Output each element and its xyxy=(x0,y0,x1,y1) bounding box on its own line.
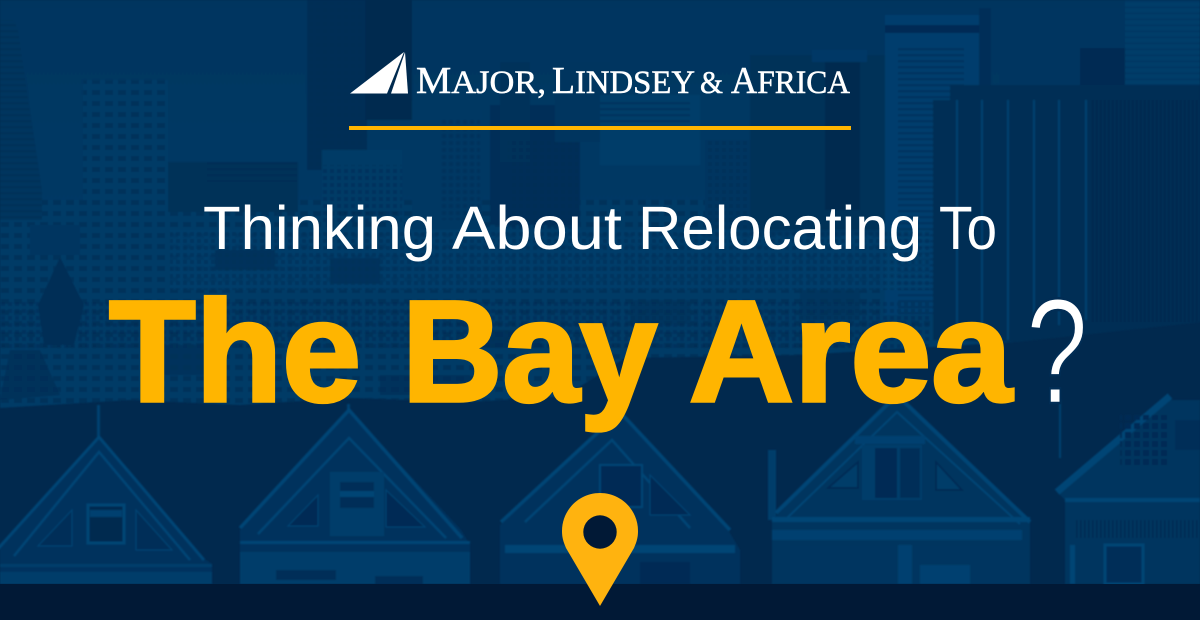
house 4 xyxy=(768,395,1030,584)
logo wordmark: & xyxy=(700,64,723,100)
subtitle: To xyxy=(939,194,997,262)
house 2 xyxy=(240,404,470,584)
divider rule xyxy=(349,126,851,130)
logo: Major, Lindsey & Africa xyxy=(350,52,850,102)
logo wordmark: LINDSEY xyxy=(552,60,695,102)
main title xyxy=(109,271,1013,432)
house 1 xyxy=(0,405,212,584)
house 5 xyxy=(1057,396,1200,584)
logo wordmark: MAJOR, xyxy=(416,60,546,102)
subtitle: Relocating xyxy=(638,194,922,262)
subtitle: About xyxy=(452,194,622,262)
bottom band xyxy=(0,584,1200,620)
background: Painted Ladies rooftops xyxy=(0,395,1200,584)
subtitle xyxy=(203,194,997,262)
lamp post xyxy=(1059,400,1061,458)
logo icon: sails xyxy=(350,52,408,94)
main title: Area xyxy=(689,271,1013,432)
question mark: ? xyxy=(1026,267,1088,435)
main title: Bay xyxy=(402,271,657,432)
logo wordmark: AFRICA xyxy=(731,60,850,102)
background: San Francisco skyline xyxy=(0,0,1200,408)
icon: location pin xyxy=(562,493,638,606)
main title: The xyxy=(109,271,361,432)
logo wordmark xyxy=(416,60,850,102)
house 3 xyxy=(500,412,740,584)
subtitle: Thinking xyxy=(203,194,436,262)
